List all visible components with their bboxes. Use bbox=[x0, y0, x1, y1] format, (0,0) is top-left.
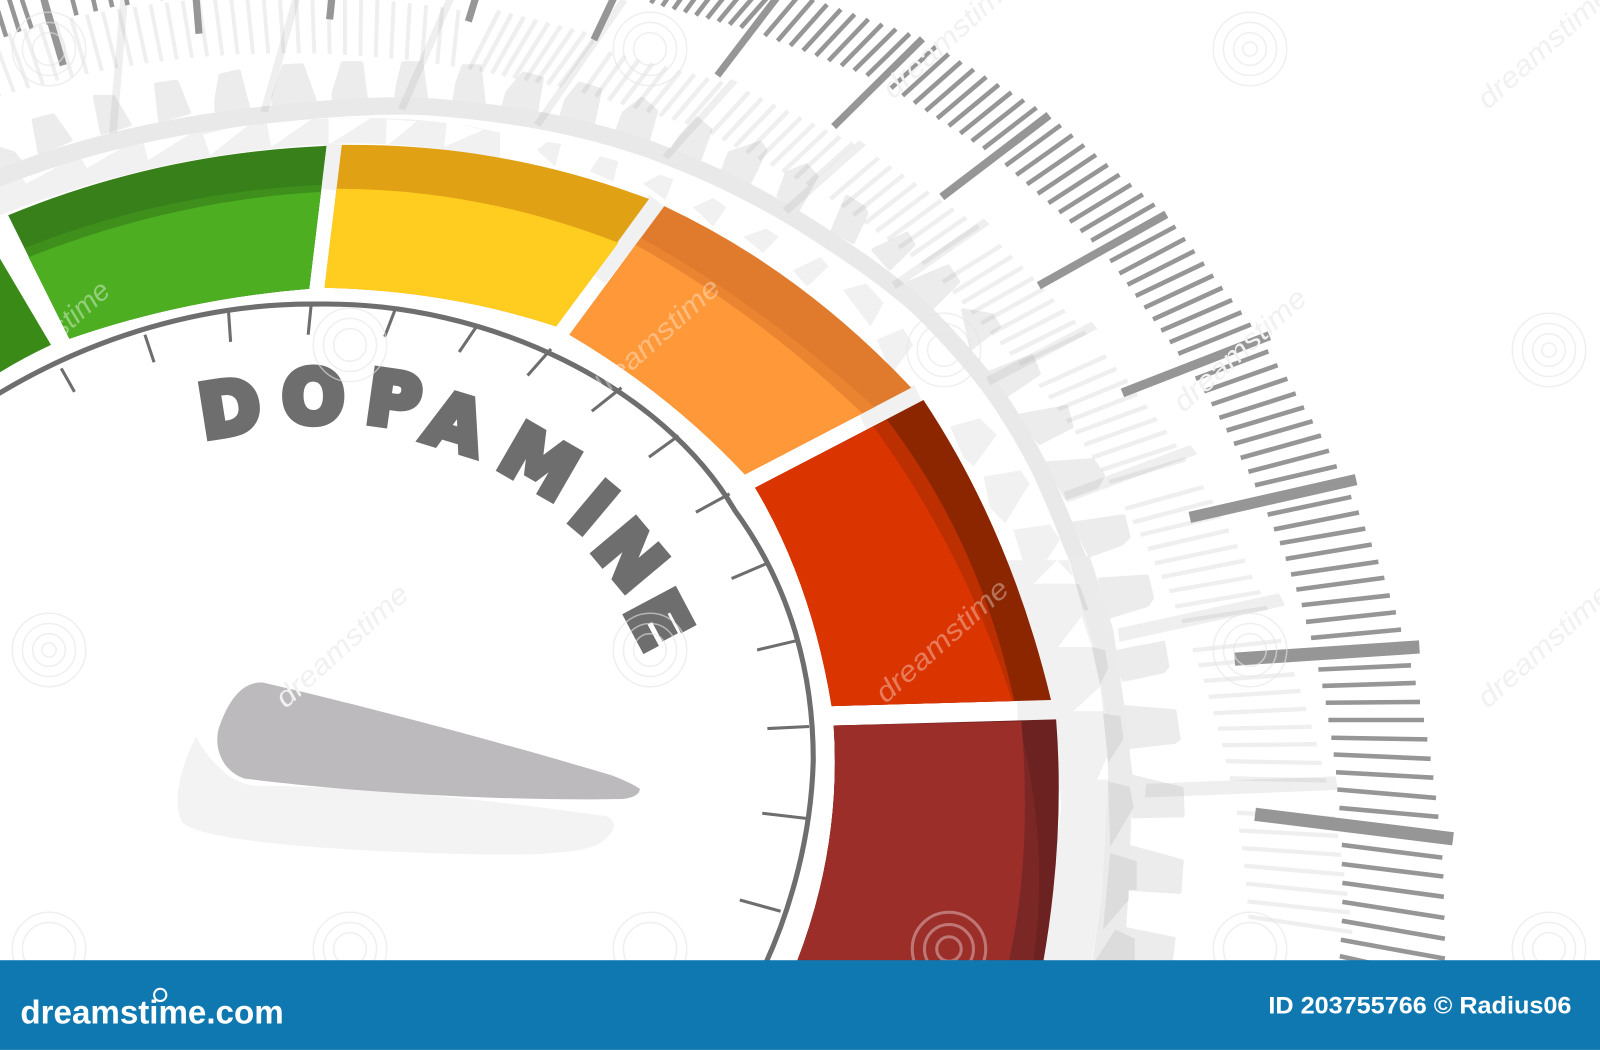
ring teeth upper right bbox=[537, 142, 1060, 580]
watermark words: dreamstime bbox=[869, 573, 1016, 709]
needle bbox=[217, 683, 640, 799]
segment: yellow bbox=[324, 145, 649, 327]
segment: orange bbox=[569, 206, 911, 474]
gear wheel bbox=[0, 63, 1183, 964]
major ticks bbox=[20, 0, 1453, 839]
arc bbox=[0, 304, 813, 964]
segment: red bbox=[755, 400, 1051, 706]
footer credit: ID 203755766 © Radius06 bbox=[1268, 992, 1571, 1019]
segment gap shading bbox=[329, 144, 1057, 711]
ring white notches bbox=[20, 118, 1110, 780]
ring field upper left bbox=[0, 118, 500, 219]
faded major ticks bbox=[109, 0, 1338, 798]
footer logo: dreamstime.com bbox=[20, 994, 284, 1031]
segment: dark red bbox=[796, 719, 1059, 964]
gear band upper bbox=[0, 106, 1080, 563]
watermark words: dreamstime bbox=[1471, 578, 1600, 714]
segment: dark green bbox=[0, 250, 51, 376]
watermark words: stime bbox=[44, 275, 117, 344]
inner ring with ghost gear teeth bbox=[0, 118, 1108, 964]
gear band lower bbox=[1068, 556, 1133, 964]
watermark words bbox=[44, 0, 1600, 714]
inner ticks bbox=[61, 304, 809, 911]
title: DOPAMINE: DOPAMINE bbox=[193, 355, 707, 663]
gear teeth bbox=[0, 63, 1183, 964]
ring field lower right bbox=[1005, 560, 1108, 964]
watermark words: dreamstime bbox=[269, 578, 416, 714]
segment: green bbox=[8, 146, 327, 339]
footer logo spiral bbox=[154, 989, 166, 1001]
watermark words: dreamstime bbox=[1167, 282, 1313, 418]
colour scale bbox=[0, 145, 1059, 964]
footer banner bbox=[0, 960, 1600, 1050]
watermark words: dreamstime bbox=[580, 272, 727, 408]
watermark spiral on dark red bbox=[912, 912, 986, 986]
gear band shadows bbox=[1076, 584, 1137, 964]
gauge arc with inner ticks bbox=[0, 304, 813, 964]
needle shadow bbox=[178, 737, 614, 855]
